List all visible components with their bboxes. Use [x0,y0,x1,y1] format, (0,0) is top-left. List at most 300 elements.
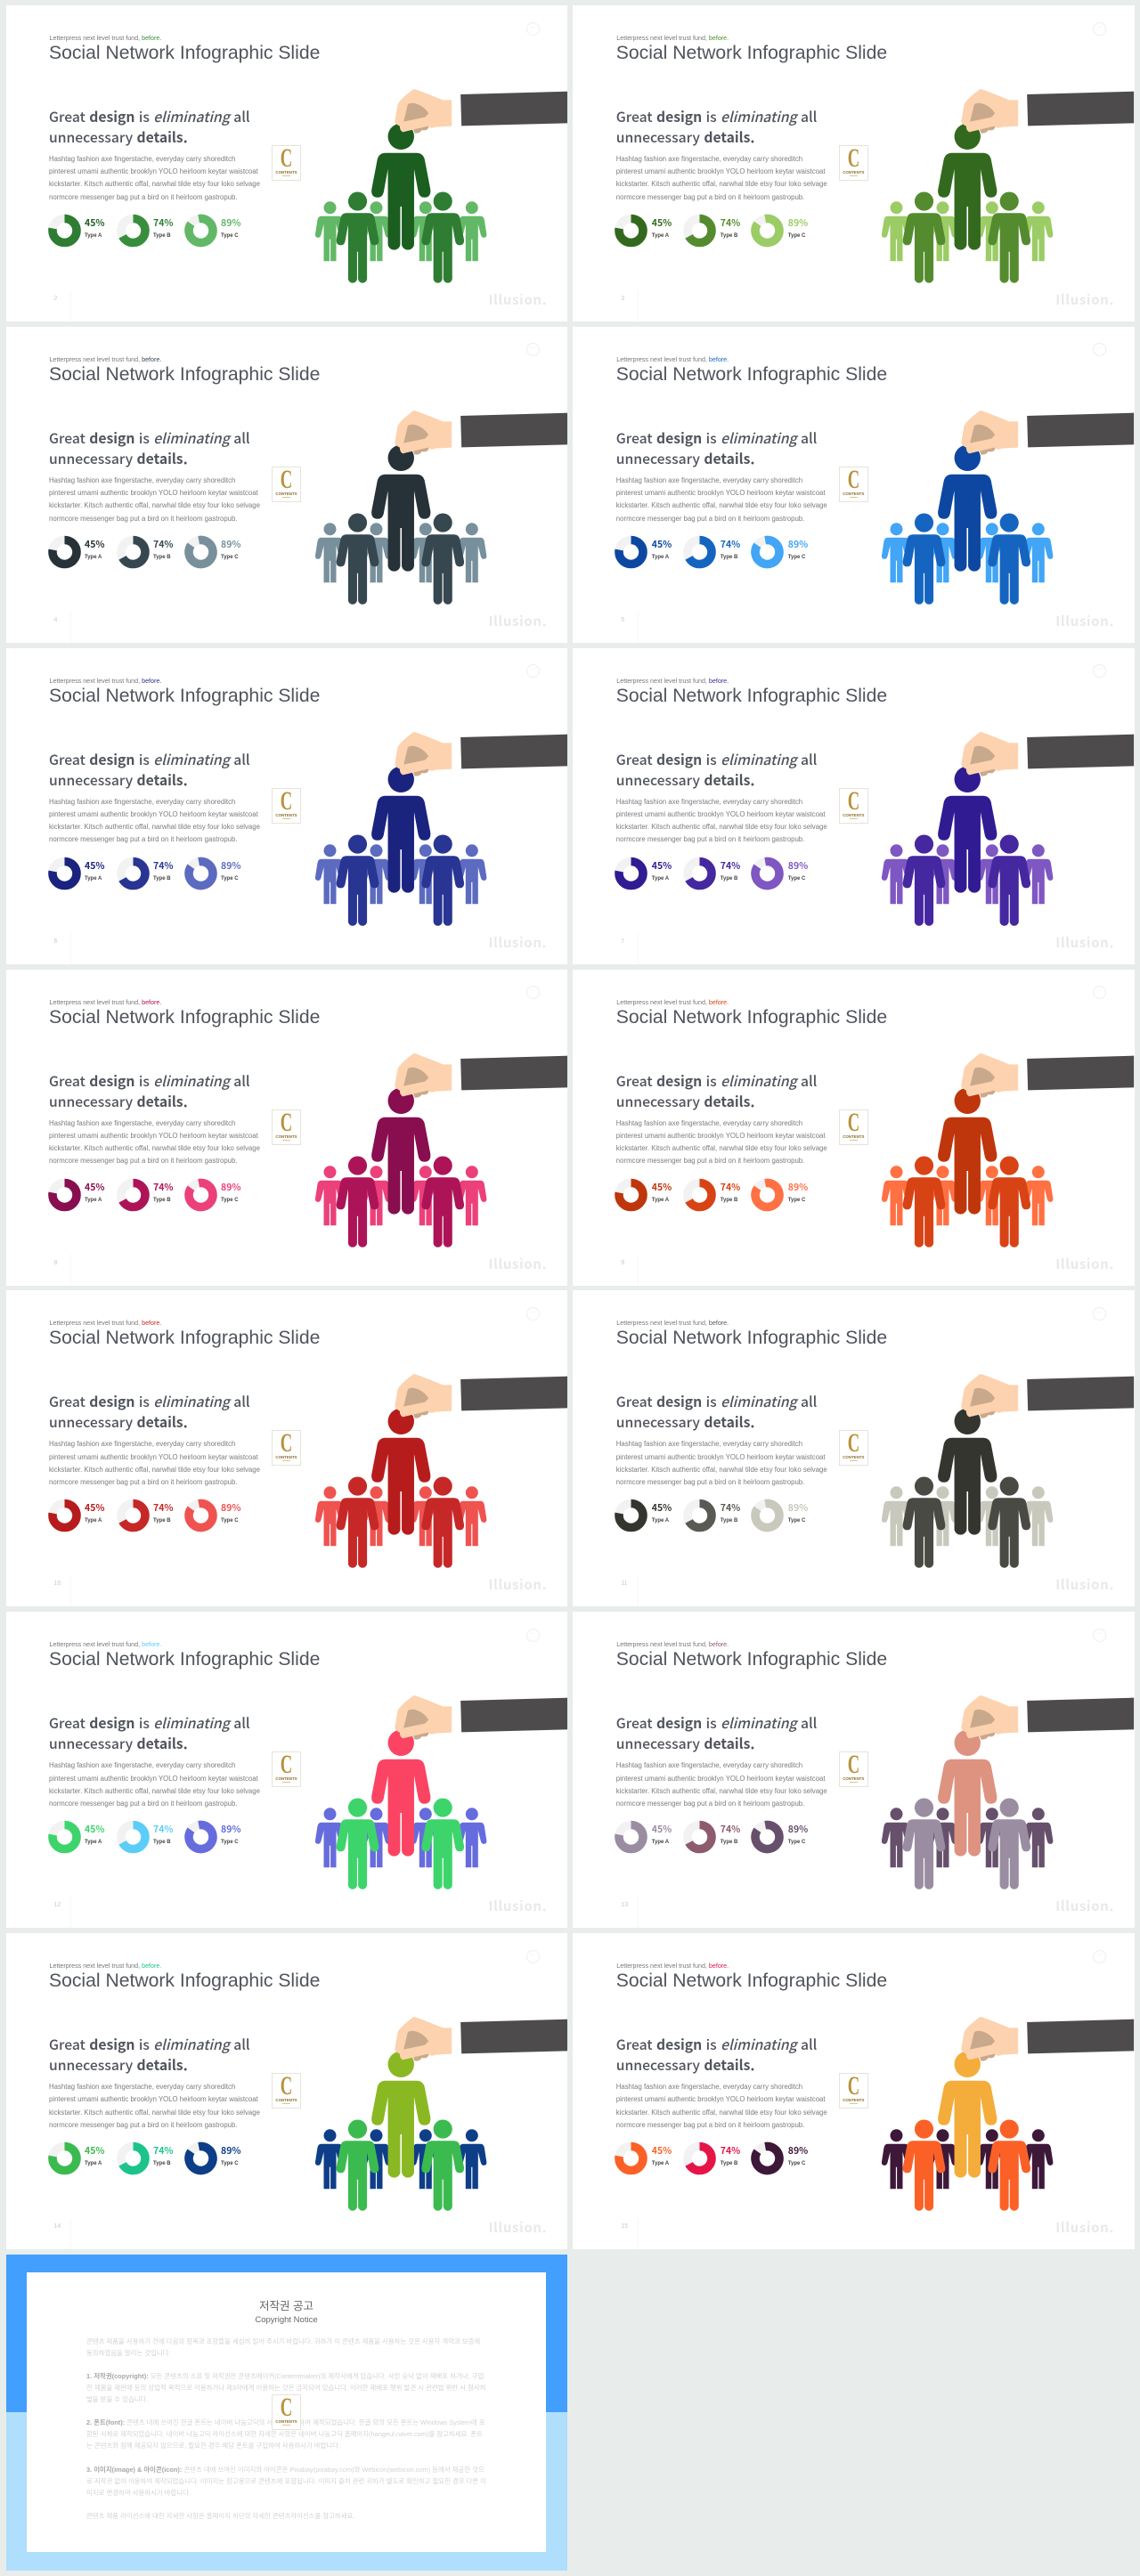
kicker text: Letterpress next level trust fund, before. [50,356,161,363]
donut value 45%: 45% [652,1823,672,1836]
logo badge: CONTENTS [843,1134,864,1139]
logo badge: CONTENTS [843,170,864,175]
body text: pinterest umami authentic brooklyn YOLO heirloom keytar waistcoat [49,1453,258,1461]
body text [616,798,827,843]
icon: more menu: ··· [530,1631,535,1637]
donut label B: Type B [153,1198,171,1203]
body text: kickstarter. Kitsch authentic offal, narwhal tilde etsy four loko selvage [49,2109,260,2117]
donut value 89%: 89% [221,859,241,873]
kicker text: Letterpress next level trust fund, before. [50,35,161,42]
body text [616,476,827,522]
kicker text: Letterpress next level trust fund, before. [616,1962,729,1970]
logo badge: C [848,1750,859,1779]
icon: more menu: ··· [1097,988,1103,994]
donut label B: Type B [721,1518,737,1524]
donut label C: Type C [221,2161,239,2166]
donut value 89%: 89% [788,1501,808,1515]
body text: pinterest umami authentic brooklyn YOLO heirloom keytar waistcoat [49,810,258,818]
logo badge [272,788,301,824]
donut label C: Type C [221,1198,239,1203]
body text: normcore messenger bag put a bird on it heirloom gastropub. [616,835,804,843]
brand mark: Illusion. [1055,1897,1114,1915]
donut label B: Type B [153,555,171,560]
icon: more menu [1093,986,1106,999]
logo badge: C [281,786,292,816]
body text [49,1759,267,1810]
donut label A: Type A [85,2161,102,2166]
icon: more menu [1093,664,1106,678]
icon: more menu: ··· [1097,667,1103,672]
panel: slide 11 charcoal [573,1290,1135,1606]
donut value 45%: 45% [85,1823,105,1836]
logo badge [272,467,301,502]
body text: normcore messenger bag put a bird on it heirloom gastropub. [616,515,804,522]
title: Social Network Infographic Slide [49,1649,320,1670]
heading: Great design is eliminating all [49,106,250,126]
body text [616,1440,827,1486]
donut value 89%: 89% [788,1823,808,1836]
body text: pinterest umami authentic brooklyn YOLO heirloom keytar waistcoat [49,167,258,175]
kicker text: Letterpress next level trust fund, before. [50,1962,161,1970]
heading [616,427,817,468]
donut value 89%: 89% [221,2144,241,2158]
page number: 5 [621,617,624,623]
heading [616,1070,817,1111]
donut label A: Type A [85,1840,102,1845]
brand mark: Illusion. [488,933,547,952]
body text [49,2081,267,2132]
donut value 89%: 89% [221,1181,241,1194]
body text: normcore messenger bag put a bird on it heirloom gastropub. [616,193,804,201]
heading [49,1391,250,1432]
logo badge: CONTENTS [843,1455,864,1459]
body text: pinterest umami authentic brooklyn YOLO heirloom keytar waistcoat [616,167,826,175]
donut value 74%: 74% [153,1823,174,1836]
page number: 9 [621,1260,624,1266]
body text: normcore messenger bag put a bird on it heirloom gastropub. [616,1800,804,1808]
donut value 45%: 45% [85,216,105,230]
illustration: people and hand [48,1374,567,1568]
icon: more menu [525,986,540,999]
title: Social Network Infographic Slide [49,1328,320,1348]
heading: Great design is eliminating all [616,1391,817,1411]
logo badge: C [281,1108,292,1137]
panel: copyright notice [5,2255,567,2571]
body text: normcore messenger bag put a bird on it heirloom gastropub. [49,1157,237,1165]
logo badge: C [848,1428,859,1458]
illustration: people and hand [615,89,1135,283]
body text: Hashtag fashion axe fingerstache, everyday carry shoreditch [49,476,235,484]
logo badge: CONTENTS [843,813,864,817]
heading: unnecessary details. [616,1091,754,1111]
logo badge: C [281,465,292,494]
brand mark: Illusion. [1055,1255,1114,1273]
icon: more menu: ··· [1097,25,1103,30]
body text: normcore messenger bag put a bird on it heirloom gastropub. [49,515,237,522]
donut label B: Type B [153,233,171,239]
donut label A: Type A [652,233,669,239]
donut label B: Type B [153,1840,171,1845]
panel: slide 6 indigo [5,648,567,964]
logo badge [272,1109,301,1145]
donut value 74%: 74% [153,1181,174,1194]
heading: unnecessary details. [616,2054,754,2075]
page number: 15 [621,2223,628,2230]
logo badge: C [281,2393,292,2422]
donut value 45%: 45% [85,859,105,873]
logo badge [839,1430,868,1466]
section 2 font: 2. 폰트(font): 콘텐츠 내에 쓰여진 한글 폰트는 네이버 나눔고딕의 서체를 사용하여 제작되었습니다. 한글 외의 모든 폰트는 Windows System에 포함된 서체로 제작되었습니다. 네이버 나눔고딕 라이선스에 대한 자세한 사항은 네이버 나눔고딕 홈페이지(hangeul.naver.com)를 참고하세요. 폰트는 콘텐츠와 함께 제공되지 않으므로, 필요한 경우 해당 폰트를 구입하여 사용하시기 바랍니다. [86,2418,485,2449]
page number: 8 [53,1260,57,1266]
panel: slide 12 bright multicolour [5,1612,567,1928]
body text: normcore messenger bag put a bird on it heirloom gastropub. [49,1800,237,1808]
kicker text: Letterpress next level trust fund, before. [50,1641,161,1648]
illustration: people and hand [48,410,567,605]
donut value 74%: 74% [721,1823,740,1836]
donut label B: Type B [153,876,171,882]
donut label A: Type A [652,1198,669,1203]
panel: slide 2 green [5,5,567,321]
body text [616,1759,835,1810]
body text: Hashtag fashion axe fingerstache, everyday carry shoreditch [616,1761,802,1769]
page number: 6 [53,939,57,945]
panel: slide 8 pink [5,970,567,1286]
donut label B: Type B [153,1518,171,1524]
icon: more menu [1093,1629,1106,1642]
logo badge [839,788,868,824]
heading [49,1070,250,1111]
body text: Hashtag fashion axe fingerstache, everyday carry shoreditch [49,155,235,163]
illustration: people and hand [573,1933,1135,2249]
donut value 74%: 74% [721,216,740,230]
logo badge: CONTENTS [275,492,297,496]
title: Social Network Infographic Slide [49,1971,320,1991]
white notice card [27,2272,546,2552]
body text: pinterest umami authentic brooklyn YOLO heirloom keytar waistcoat [616,1453,826,1461]
donut label B: Type B [721,1840,737,1845]
body text: Hashtag fashion axe fingerstache, everyday carry shoreditch [616,1440,802,1448]
donut label A: Type A [652,1518,669,1524]
illustration: people and hand [615,1374,1135,1568]
illustration: people and hand [48,1053,567,1247]
heading: unnecessary details. [49,448,188,468]
logo badge: C [848,143,859,173]
donut value 74%: 74% [153,859,174,873]
donut value 89%: 89% [221,216,241,230]
logo badge [272,2073,301,2109]
title: Social Network Infographic Slide [616,43,887,63]
kicker text: Letterpress next level trust fund, before. [616,999,729,1006]
donut label A: Type A [85,876,102,882]
body text: kickstarter. Kitsch authentic offal, narwhal tilde etsy four loko selvage [616,501,827,509]
body text: kickstarter. Kitsch authentic offal, narwhal tilde etsy four loko selvage [49,823,260,831]
body text: kickstarter. Kitsch authentic offal, narwhal tilde etsy four loko selvage [49,1466,260,1474]
page number: 10 [53,1581,61,1587]
illustration: people and hand [573,1612,1135,1928]
kicker text: Letterpress next level trust fund, before. [616,35,729,42]
panel: slide 13 muted mauve [573,1612,1135,1928]
donut value 45%: 45% [85,1181,105,1194]
icon: more menu [1093,21,1106,36]
heading: Great design is eliminating all [616,1070,817,1091]
logo badge: CONTENTS [843,2098,864,2102]
heading [49,2034,250,2075]
donut label A: Type A [85,1198,102,1203]
kicker text: Letterpress next level trust fund, before. [616,1320,729,1327]
heading: Great design is eliminating all [616,749,817,769]
body text: kickstarter. Kitsch authentic offal, narwhal tilde etsy four loko selvage [616,180,827,188]
heading [49,427,250,468]
logo badge: CONTENTS [275,1776,297,1781]
icon: more menu [525,1307,540,1321]
kicker text: Letterpress next level trust fund, before. [50,1320,161,1327]
icon: more menu [1093,1950,1106,1963]
donut label A: Type A [85,555,102,560]
body text: normcore messenger bag put a bird on it heirloom gastropub. [616,1157,804,1165]
body text: pinterest umami authentic brooklyn YOLO heirloom keytar waistcoat [49,489,258,497]
body text: kickstarter. Kitsch authentic offal, narwhal tilde etsy four loko selvage [616,2109,827,2117]
illustration: people and hand [48,732,567,926]
kicker text: Letterpress next level trust fund, before. [616,1641,729,1648]
donut label C: Type C [221,555,239,560]
illustration: people and hand [48,89,567,283]
donut value 74%: 74% [153,2144,174,2158]
panel: slide 9 deep orange [573,970,1135,1286]
page number: 2 [53,296,57,302]
heading: unnecessary details. [49,1091,188,1111]
title: Social Network Infographic Slide [49,686,320,706]
brand mark: Illusion. [1055,612,1114,630]
logo badge: C [848,786,859,816]
donut label A: Type A [85,1518,102,1524]
page number: 13 [621,1902,628,1908]
heading [616,106,817,147]
icon: more menu: ··· [530,345,535,351]
donut value 74%: 74% [721,2144,740,2158]
body text: pinterest umami authentic brooklyn YOLO heirloom keytar waistcoat [616,1774,826,1783]
body text: kickstarter. Kitsch authentic offal, narwhal tilde etsy four loko selvage [49,1787,260,1795]
icon: more menu: ··· [1097,1310,1103,1315]
body text: Hashtag fashion axe fingerstache, everyday carry shoreditch [49,1761,235,1769]
logo badge [272,2394,301,2430]
illustration: people and hand [615,1053,1135,1247]
donut value 45%: 45% [652,538,672,551]
donut value 45%: 45% [85,2144,105,2158]
donut label C: Type C [221,876,239,882]
body text: kickstarter. Kitsch authentic offal, narwhal tilde etsy four loko selvage [616,1144,827,1152]
logo badge: CONTENTS [275,170,297,175]
donut value 89%: 89% [221,1501,241,1515]
body text: kickstarter. Kitsch authentic offal, narwhal tilde etsy four loko selvage [49,1144,260,1152]
donut label B: Type B [721,1198,737,1203]
heading: Great design is eliminating all [49,2034,250,2054]
icon: more menu: ··· [1097,345,1103,351]
logo badge: C [848,2071,859,2101]
title: Social Network Infographic Slide [616,1971,887,1991]
icon: more menu [525,343,540,356]
donut label C: Type C [788,2161,805,2166]
kicker text: Letterpress next level trust fund, before. [50,999,161,1006]
donut value 74%: 74% [721,859,740,873]
donut value 45%: 45% [652,1181,672,1194]
donut label C: Type C [788,876,805,882]
heading: unnecessary details. [49,126,188,147]
panel: slide 10 red [5,1290,567,1606]
heading: Great design is eliminating all [49,749,250,769]
donut value 45%: 45% [85,1501,105,1515]
heading: unnecessary details. [49,1411,188,1432]
donut value 89%: 89% [788,216,808,230]
donut label B: Type B [721,2161,737,2166]
donut label C: Type C [788,1198,805,1203]
body text [616,1119,827,1165]
donut value 45%: 45% [652,2144,672,2158]
icon: more menu: ··· [1097,1953,1103,1958]
donut value 74%: 74% [153,538,174,551]
donut value 74%: 74% [721,1501,740,1515]
icon: more menu [525,1629,540,1642]
donut label A: Type A [652,555,669,560]
body text: Hashtag fashion axe fingerstache, everyday carry shoreditch [616,155,802,163]
kicker text: Letterpress next level trust fund, before. [50,678,161,685]
page number: 4 [53,617,57,623]
illustration: people and hand [615,410,1135,605]
donut label A: Type A [85,233,102,239]
title: Social Network Infographic Slide [49,364,320,385]
body text: normcore messenger bag put a bird on it heirloom gastropub. [616,2121,804,2129]
body text: kickstarter. Kitsch authentic offal, narwhal tilde etsy four loko selvage [616,823,827,831]
illustration: people and hand [5,1933,567,2249]
brand mark: Illusion. [488,2218,547,2237]
logo badge: CONTENTS [275,2419,297,2424]
brand mark: Illusion. [1055,933,1114,952]
heading: Great design is eliminating all [616,106,817,126]
body text: pinterest umami authentic brooklyn YOLO heirloom keytar waistcoat [616,810,826,818]
body text [49,476,260,522]
title: Social Network Infographic Slide [616,364,887,385]
donut value 45%: 45% [652,1501,672,1515]
body text: normcore messenger bag put a bird on it heirloom gastropub. [49,835,237,843]
heading: unnecessary details. [616,769,754,790]
title: Social Network Infographic Slide [49,1007,320,1028]
logo badge [839,2073,868,2109]
logo badge [272,145,301,181]
heading [49,1712,250,1753]
logo badge [272,1430,301,1466]
donut label C: Type C [221,1840,239,1845]
panel: slide 7 deep purple [573,648,1135,964]
body text: pinterest umami authentic brooklyn YOLO heirloom keytar waistcoat [49,1132,258,1140]
donut value 89%: 89% [788,1181,808,1194]
body text: pinterest umami authentic brooklyn YOLO heirloom keytar waistcoat [616,1132,826,1140]
donut value 89%: 89% [788,538,808,551]
title: Social Network Infographic Slide [616,1007,887,1028]
heading: Great design is eliminating all [49,1070,250,1091]
body text [616,155,827,201]
body text [49,1119,260,1165]
logo badge: C [281,1750,292,1779]
donut label A: Type A [652,1840,669,1845]
heading: Great design is eliminating all [616,1712,817,1733]
icon: more menu: ··· [530,25,535,30]
logo badge: CONTENTS [843,492,864,496]
heading [616,2034,817,2075]
brand mark: Illusion. [488,290,547,309]
icon: more menu: ··· [530,1310,535,1315]
brand mark: Illusion. [488,1897,547,1915]
logo badge [839,1751,868,1787]
heading: Great design is eliminating all [616,427,817,448]
heading: Great design is eliminating all [616,2034,817,2054]
body text: normcore messenger bag put a bird on it heirloom gastropub. [49,1478,237,1486]
logo badge: CONTENTS [275,813,297,817]
donut value 89%: 89% [788,2144,808,2158]
page number: 11 [621,1581,628,1587]
body text: Hashtag fashion axe fingerstache, everyday carry shoreditch [49,1119,235,1127]
body text: Hashtag fashion axe fingerstache, everyday carry shoreditch [616,798,802,806]
donut value 45%: 45% [652,216,672,230]
body text: Hashtag fashion axe fingerstache, everyday carry shoreditch [616,2083,802,2091]
panel: slide 5 blue [573,327,1135,643]
donut value 89%: 89% [221,538,241,551]
logo badge: C [281,143,292,173]
body text: Hashtag fashion axe fingerstache, everyday carry shoreditch [49,2083,235,2091]
heading [616,749,817,790]
body text: pinterest umami authentic brooklyn YOLO heirloom keytar waistcoat [49,1774,258,1783]
icon: more menu [525,21,540,36]
body text: Hashtag fashion axe fingerstache, everyday carry shoreditch [49,1440,235,1448]
donut label A: Type A [652,876,669,882]
heading: unnecessary details. [49,1733,188,1753]
icon: more menu [525,1950,540,1963]
donut value 89%: 89% [221,1823,241,1836]
brand mark: Illusion. [1055,2218,1114,2237]
donut label C: Type C [221,1518,239,1524]
brand mark: Illusion. [488,1255,547,1273]
section 1 copyright: 1. 저작권(copyright): 모든 콘텐츠의 소유 및 저작권은 콘텐츠메이커(Contentmaker)의 제작사에게 있습니다. 사전 승낙 없이 재배포 하거나, 구입한 제품을 재판매 등의 상업적 목적으로 이용하거나 제3자에게 이용하는 것은 금지되어 있습니다. 이러한 재배포 행위 발견 시 관련법 위반 시 형사처벌을 받을 수 있습니다. [86,2372,485,2402]
donut label C: Type C [788,1840,805,1845]
donut label C: Type C [788,1518,805,1524]
body text: pinterest umami authentic brooklyn YOLO heirloom keytar waistcoat [49,2095,258,2103]
logo badge: CONTENTS [275,2098,297,2102]
icon: more menu: ··· [530,667,535,672]
heading: unnecessary details. [49,2054,188,2075]
panel: slide 14 green and navy [5,1933,567,2249]
illustration: people and hand [615,732,1135,926]
brand mark: Illusion. [1055,290,1114,309]
heading [49,749,250,790]
logo badge: C [281,1428,292,1458]
kicker text: Letterpress next level trust fund, before. [616,678,729,685]
logo badge: CONTENTS [275,1455,297,1459]
heading [616,1712,817,1753]
heading: unnecessary details. [49,769,188,790]
title: Social Network Infographic Slide [616,686,887,706]
illustration: people and hand [5,1612,567,1928]
heading [49,106,250,147]
donut label C: Type C [788,233,805,239]
brand mark: Illusion. [1055,1575,1114,1594]
logo badge: C [848,1108,859,1137]
heading: Great design is eliminating all [49,427,250,448]
donut label B: Type B [721,555,737,560]
body text: kickstarter. Kitsch authentic offal, narwhal tilde etsy four loko selvage [49,501,260,509]
icon: more menu [1093,1307,1106,1321]
brand mark: Illusion. [488,1575,547,1594]
logo badge [839,467,868,502]
closing line: 콘텐츠 제품 라이선스에 대한 자세한 사항은 홈페이지 하단의 자세한 콘텐츠라이선스를 참고하세요. [86,2511,354,2520]
donut value 74%: 74% [153,1501,174,1515]
